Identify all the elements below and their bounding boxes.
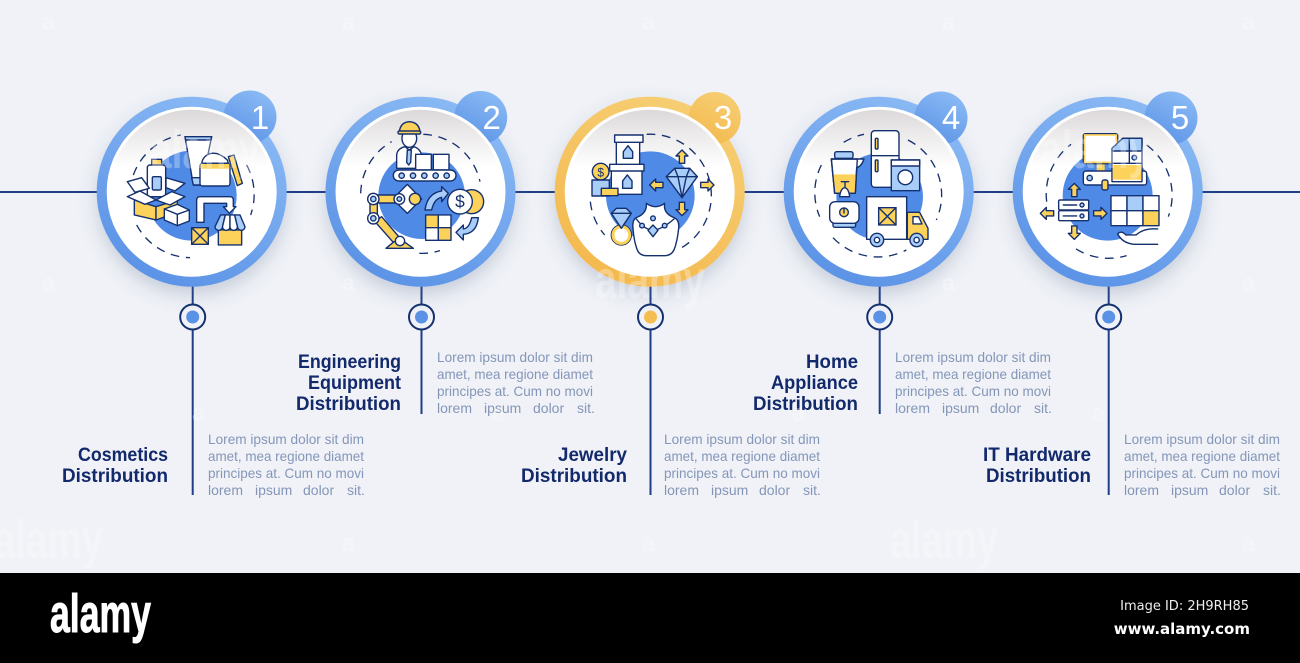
footer band (0, 573, 1300, 663)
icon: home appliances (815, 131, 942, 257)
text: engineering heading: Engineering (298, 352, 401, 373)
text: IT hardware description: lorem (1124, 482, 1159, 498)
watermarks: alamy (1040, 120, 1150, 180)
text: IT hardware heading: IT Hardware (983, 445, 1091, 466)
text: home appliance description: dolor (990, 400, 1021, 416)
watermarks: a (42, 270, 56, 297)
text: cosmetics description: Lorem ipsum dolor sit dim (208, 431, 364, 447)
text: IT hardware heading: Distribution (986, 466, 1091, 487)
text: engineering description: amet, mea regione diamet (437, 366, 593, 382)
text: jewelry heading (521, 445, 627, 487)
text: home appliance description: amet, mea regione diamet (895, 366, 1051, 382)
text: jewelry description: ipsum (711, 482, 748, 498)
text: jewelry description: Lorem ipsum dolor sit dim (664, 431, 820, 447)
text: jewelry description: amet, mea regione diamet (664, 448, 820, 464)
text: jewelry description: principes at. Cum no movi (664, 465, 820, 481)
text: cosmetics description (208, 431, 365, 498)
watermarks: a (942, 270, 956, 297)
number 4: 4 (942, 99, 960, 136)
text: home appliance description: sit. (1034, 400, 1052, 416)
text: cosmetics heading: Distribution (62, 466, 168, 487)
number 1: 1 (251, 99, 269, 136)
text: home appliance heading: Appliance (771, 373, 858, 394)
text: engineering description: ipsum (484, 400, 521, 416)
text: cosmetics description: ipsum (255, 482, 292, 498)
text: jewelry description: sit. (803, 482, 821, 498)
step 2 connector and node (409, 280, 434, 414)
text: engineering description: principes at. Cum no movi (437, 383, 593, 399)
text: cosmetics description: amet, mea regione diamet (208, 448, 364, 464)
text: engineering description (437, 349, 595, 416)
text: engineering heading: Distribution (296, 394, 401, 415)
text: cosmetics description: principes at. Cum no movi (208, 465, 364, 481)
step 3 connector and node (638, 280, 663, 495)
text: cosmetics description: dolor (303, 482, 334, 498)
watermarks: alamy (890, 510, 998, 570)
footer image id: Image ID: 2H9RH85 (1120, 599, 1249, 614)
watermarks: a (1092, 400, 1106, 427)
text: home appliance description: lorem (895, 400, 930, 416)
text: home appliance description: ipsum (942, 400, 979, 416)
watermarks: a (342, 270, 356, 297)
step 5 circle (1013, 92, 1203, 287)
step 1 circle (97, 90, 287, 287)
watermarks: a (642, 9, 656, 36)
number 2: 2 (483, 99, 501, 136)
watermarks: a (42, 9, 56, 36)
text: jewelry description: lorem (664, 482, 699, 498)
watermarks: a (642, 530, 656, 557)
text: home appliance heading: Distribution (753, 394, 858, 415)
watermarks: a (342, 9, 356, 36)
step 2 circle (326, 91, 516, 287)
step 5 connector and node (1096, 280, 1121, 495)
text: engineering heading (296, 352, 402, 415)
text: IT hardware description: amet, mea regione diamet (1124, 448, 1280, 464)
text: engineering description: Lorem ipsum dolor sit dim (437, 349, 593, 365)
icon: jewelry (590, 134, 714, 256)
text: jewelry heading: Jewelry (558, 445, 627, 466)
text: IT hardware heading (983, 445, 1091, 487)
text: home appliance description: Lorem ipsum dolor sit dim (895, 349, 1051, 365)
text: home appliance description: principes at. Cum no movi (895, 383, 1051, 399)
text: jewelry description: dolor (759, 482, 790, 498)
timeline horizontal line (0, 191, 1300, 193)
watermarks: a (192, 400, 206, 427)
text: IT hardware description: sit. (1263, 482, 1281, 498)
text: jewelry heading: Distribution (521, 466, 627, 487)
text: IT hardware description: ipsum (1171, 482, 1208, 498)
step 1 connector and node (180, 280, 205, 495)
watermarks: a (492, 400, 506, 427)
text: IT hardware description (1124, 431, 1281, 498)
text: home appliance heading: Home (806, 352, 858, 373)
text: cosmetics description: lorem (208, 482, 243, 498)
text: IT hardware description: dolor (1219, 482, 1250, 498)
text: jewelry description (664, 431, 821, 498)
icon: engineering equipment: $ (455, 192, 465, 212)
number 3: 3 (714, 99, 732, 136)
step 3 circle (555, 92, 745, 287)
footer logo: alamy (50, 584, 151, 644)
number 5: 5 (1171, 99, 1189, 136)
text: engineering description: lorem (437, 400, 472, 416)
icon: IT hardware (1040, 134, 1172, 258)
text: engineering description: dolor (533, 400, 564, 416)
text: engineering description: sit. (577, 400, 595, 416)
watermarks: a (342, 530, 356, 557)
footer url: www.alamy.com (1114, 620, 1250, 638)
text: cosmetics heading: Cosmetics (78, 445, 168, 466)
icon: jewelry: $ (597, 165, 604, 179)
watermarks: alamy (150, 120, 260, 180)
watermarks: a (942, 9, 956, 36)
text: IT hardware description: Lorem ipsum dolor sit dim (1124, 431, 1280, 447)
watermarks: a (792, 400, 806, 427)
text: engineering heading: Equipment (308, 373, 402, 394)
text: IT hardware description: principes at. Cum no movi (1124, 465, 1280, 481)
icon: cosmetics (127, 135, 254, 258)
watermarks: a (1242, 530, 1256, 557)
text: home appliance heading (753, 352, 858, 415)
watermarks: alamy (595, 250, 705, 310)
watermarks: a (1242, 9, 1256, 36)
text: home appliance description (895, 349, 1052, 416)
icon: engineering equipment (361, 122, 484, 253)
step 4 connector and node (867, 280, 892, 414)
step 4 circle (784, 92, 974, 287)
text: cosmetics heading (62, 445, 168, 487)
watermarks: a (1242, 270, 1256, 297)
text: cosmetics description: sit. (347, 482, 365, 498)
